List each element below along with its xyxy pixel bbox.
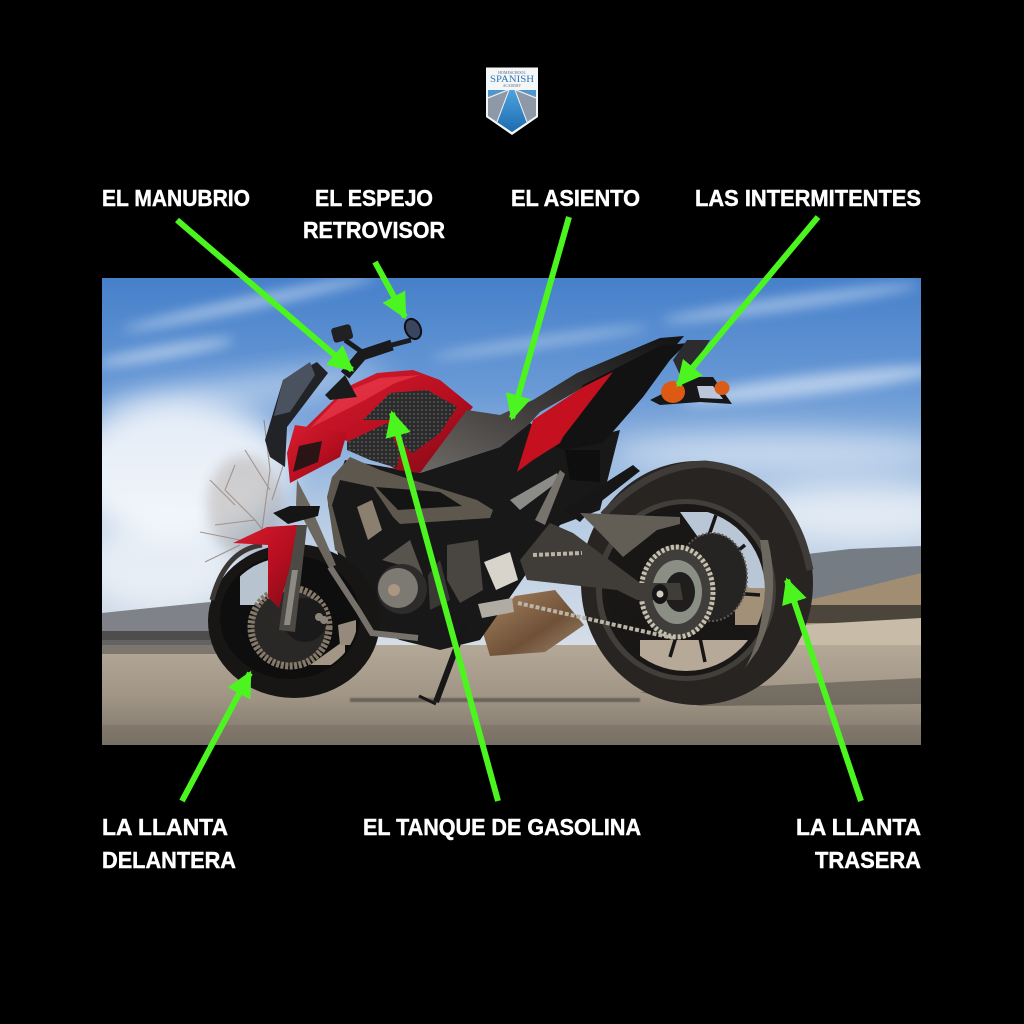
infographic canvas xyxy=(102,68,921,868)
tyre xyxy=(581,461,813,705)
radiator shroud xyxy=(287,425,347,483)
label: el manubrio: EL MANUBRIO xyxy=(102,185,250,211)
label: el espejo retrovisor: RETROVISOR xyxy=(303,217,445,243)
chain xyxy=(518,553,673,638)
brake disc xyxy=(677,533,747,621)
tank xyxy=(303,370,473,473)
arrow: la llanta delantera xyxy=(182,673,250,801)
sprocket and chain ring xyxy=(639,545,715,639)
sky with clouds xyxy=(102,278,921,645)
label: la llanta delantera xyxy=(102,814,236,873)
front brake disc xyxy=(251,588,329,666)
rear mudguard xyxy=(576,465,640,522)
subframe xyxy=(510,473,560,510)
motorcycle photo xyxy=(102,278,921,745)
arrow: la llanta trasera xyxy=(787,580,861,801)
label: la llanta trasera: TRASERA xyxy=(815,847,921,873)
exhaust xyxy=(482,590,584,656)
ground xyxy=(102,645,921,745)
headlight cowl xyxy=(265,362,328,467)
rear wheel xyxy=(581,461,813,705)
arrow: las intermitentes xyxy=(678,217,818,385)
wheel interior xyxy=(640,512,765,671)
turn signals xyxy=(661,381,730,403)
label: la llanta trasera xyxy=(796,814,921,873)
front wheel xyxy=(208,544,380,698)
label: la llanta trasera: LA LLANTA xyxy=(796,814,921,840)
arrow: el espejo retrovisor xyxy=(375,262,405,317)
swingarm xyxy=(520,523,683,600)
front fork xyxy=(273,480,336,632)
label: la llanta delantera: DELANTERA xyxy=(102,847,236,873)
frame xyxy=(327,457,493,558)
label: las intermitentes: LAS INTERMITENTES xyxy=(695,185,921,211)
arrow: el asiento xyxy=(512,217,569,418)
tail black xyxy=(558,343,685,445)
label: el espejo retrovisor xyxy=(303,185,445,243)
dark under-body and engine base xyxy=(328,423,620,650)
label: el espejo retrovisor: EL ESPEJO xyxy=(315,185,433,211)
logo: Homeschool Spanish Academy shield: HOMESCHOOL xyxy=(498,70,526,75)
front fender xyxy=(233,525,297,608)
arrow: el manubrio xyxy=(177,220,352,370)
logo: Homeschool Spanish Academy shield xyxy=(486,68,538,135)
engine parts xyxy=(357,500,518,618)
mountains xyxy=(102,546,921,646)
handlebars and mirror xyxy=(325,316,424,400)
label: el asiento: EL ASIENTO xyxy=(511,185,640,211)
seat xyxy=(420,336,684,473)
logo: Homeschool Spanish Academy shield: ACADEMY xyxy=(503,84,521,88)
bare tree xyxy=(200,420,285,562)
logo: Homeschool Spanish Academy shield: SPANISH xyxy=(490,75,534,85)
arrow: el tanque de gasolina xyxy=(392,413,498,801)
license plate and bracket xyxy=(650,340,732,405)
tail red panel xyxy=(517,372,613,472)
downpipe exhaust xyxy=(330,567,418,638)
tank pads xyxy=(363,390,457,453)
label: la llanta delantera: LA LLANTA xyxy=(102,814,228,840)
label: el tanque de gasolina: EL TANQUE DE GASOLINA xyxy=(363,814,641,840)
side stand xyxy=(418,644,461,706)
